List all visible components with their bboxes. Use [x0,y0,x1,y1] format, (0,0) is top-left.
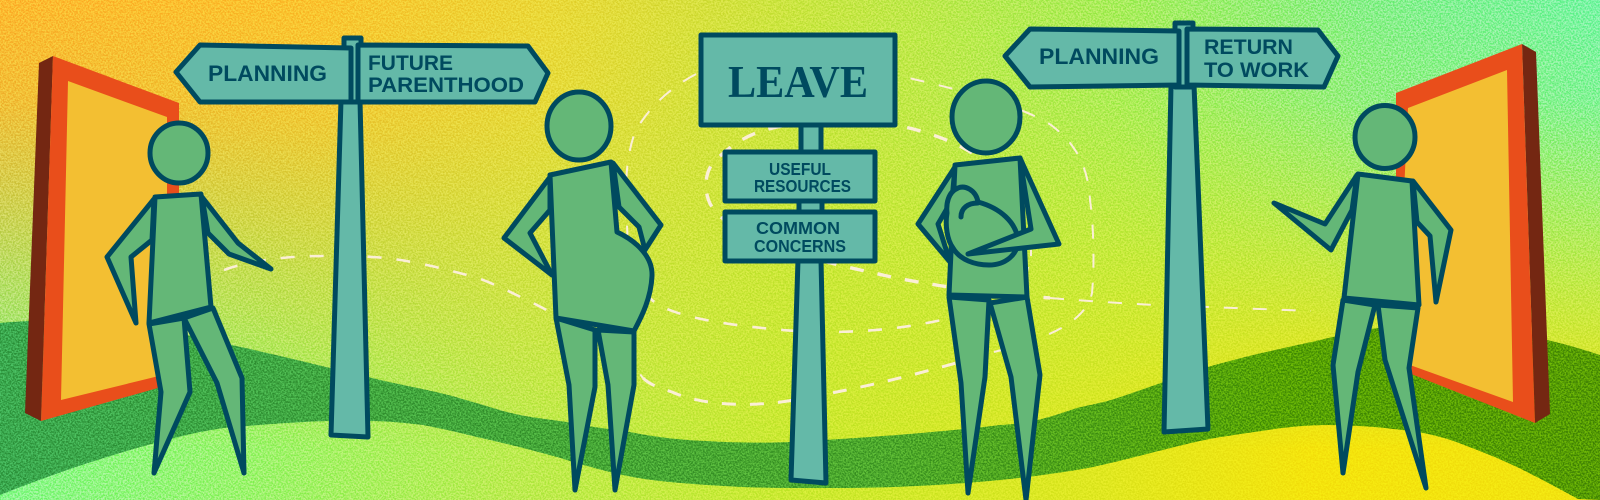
sign: planning [176,45,351,102]
rolling green hill band [0,321,1600,500]
door: left [25,56,179,421]
signpost: leave [701,35,895,483]
sign: useful resources: RESOURCES [754,176,851,196]
sign: future parenthood: PARENTHOOD [368,73,524,97]
figure: person holding baby [918,81,1059,500]
sign: return to work [1187,29,1338,87]
figure: pregnant person [504,92,661,490]
figure: person returning [1274,106,1451,488]
sign: return to work: TO WORK [1204,58,1309,82]
signpost: planning / future parenthood [176,38,548,437]
sign: leave: LEAVE [728,56,868,107]
sign: future parenthood: FUTURE [368,51,453,75]
signpost: planning / return to work [1005,23,1338,432]
sign: useful resources [725,152,875,201]
arm cradling baby [968,158,1059,254]
sign: planning [1005,29,1179,87]
dashed journey paths [224,74,1311,404]
sign: leave [701,35,895,125]
figure: person leaving [107,123,271,473]
sign: planning: PLANNING [208,61,327,86]
sign: common concerns: CONCERNS [754,236,846,256]
sign: useful resources: USEFUL [769,159,831,179]
sign: common concerns [725,212,875,261]
door: right [1396,44,1550,423]
sign: future parenthood [358,45,548,102]
sign: return to work: RETURN [1204,35,1293,59]
icon: baby [946,187,1018,265]
sign: planning: PLANNING [1039,44,1159,69]
sign: common concerns: COMMON [756,218,840,238]
